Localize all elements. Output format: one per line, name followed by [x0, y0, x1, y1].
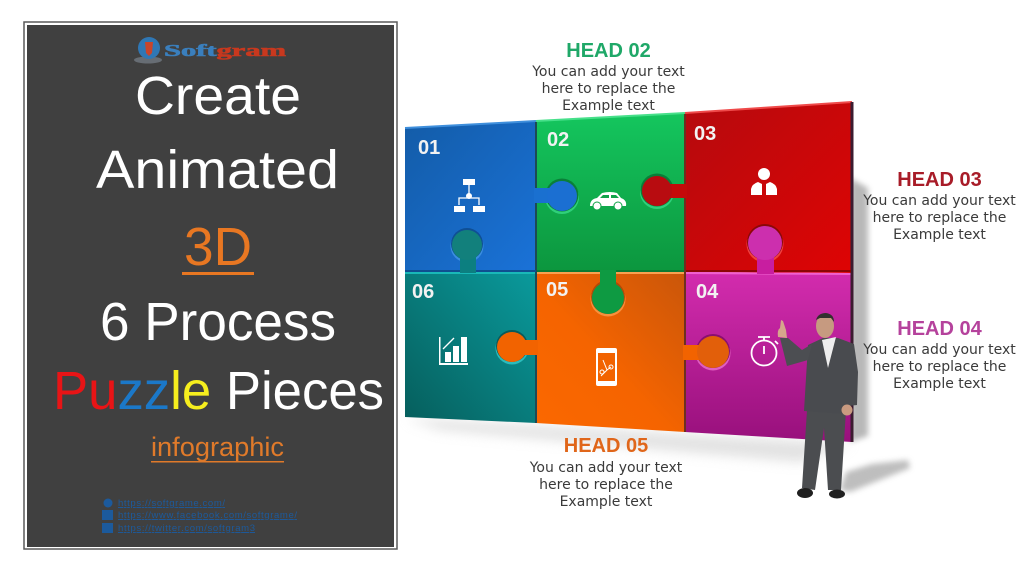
number 05: 05	[546, 279, 568, 301]
icon: smartphone	[596, 348, 617, 386]
knob: 05 into 04	[683, 334, 730, 370]
callout: HEAD 04	[862, 318, 1016, 392]
number 02: 02	[547, 129, 569, 151]
logo: Softgram	[134, 37, 286, 64]
figure: presenter	[778, 313, 858, 498]
number 03: 03	[694, 123, 716, 145]
panel: title card	[24, 22, 397, 549]
shirt	[822, 337, 836, 368]
title line: Animated: Animated	[96, 140, 339, 200]
callout: HEAD 02: You can add your text	[531, 64, 685, 80]
callout: HEAD 05: HEAD 05	[564, 435, 648, 457]
title line: Create: Create	[135, 66, 301, 126]
legs	[802, 410, 846, 490]
social links: https://twitter.com/softgram3	[118, 523, 255, 534]
callout: HEAD 03: HEAD 03	[897, 169, 982, 191]
knob: 05 into 06	[496, 330, 538, 364]
callout: HEAD 03: You can add your text	[862, 193, 1016, 209]
callout: HEAD 02	[531, 40, 685, 114]
puzzle: six pieces	[405, 102, 852, 442]
logo: Softgram: Soft gram	[164, 41, 286, 60]
callout: HEAD 04: Example text	[893, 376, 986, 392]
icon: businessman	[751, 168, 777, 195]
hand	[778, 320, 787, 338]
callout: HEAD 03: here to replace the	[873, 210, 1006, 226]
social links: https://softgrame.com/	[118, 498, 225, 509]
number 04: 04	[696, 281, 719, 303]
knob: 03 into 02	[640, 174, 687, 209]
piece 03	[685, 102, 852, 273]
callout: HEAD 04: HEAD 04	[897, 318, 983, 340]
knob: 06 into 01	[450, 228, 484, 273]
jacket	[804, 338, 858, 414]
callout: HEAD 04: You can add your text	[862, 342, 1016, 358]
callout: HEAD 02: here to replace the	[542, 81, 675, 97]
icon: stopwatch	[752, 337, 778, 366]
head	[816, 314, 834, 338]
title line: 6 Process: 6 Process	[100, 292, 336, 352]
icon: hierarchy	[454, 179, 485, 212]
callout: HEAD 04: here to replace the	[873, 359, 1006, 375]
knob: 01 into 02	[534, 178, 579, 214]
callout: HEAD 05	[529, 435, 683, 510]
piece 02	[536, 113, 685, 272]
icon: bar chart	[439, 337, 468, 365]
piece 05	[536, 272, 685, 432]
title line: Puzzle Pieces: Puzzle Pieces	[53, 361, 384, 421]
arm	[780, 338, 812, 366]
social links: https://www.facebook.com/softgrame/	[118, 510, 297, 521]
knob: 02 into 05	[590, 270, 626, 316]
bevels	[405, 102, 852, 442]
icon: car	[590, 192, 626, 210]
title line: 3D: 3D	[184, 217, 252, 277]
callout: HEAD 02: HEAD 02	[566, 40, 651, 62]
social links	[102, 498, 297, 534]
subtitle: infographic: infographic	[151, 432, 284, 462]
callout: HEAD 05: here to replace the	[539, 477, 673, 493]
shadow: man on floor	[840, 460, 910, 492]
number 06: 06	[412, 281, 434, 303]
piece 04	[685, 272, 852, 442]
callout: HEAD 05: You can add your text	[529, 460, 683, 476]
shadow: puzzle wall	[405, 178, 868, 462]
knob: 04 into 03	[746, 224, 784, 274]
piece 01	[405, 121, 536, 272]
callout: HEAD 05: Example text	[560, 494, 653, 510]
callout: HEAD 02: Example text	[562, 98, 655, 114]
piece 06	[405, 272, 536, 423]
shoes	[797, 488, 813, 498]
callout: HEAD 03: Example text	[893, 227, 986, 243]
callout: HEAD 03	[862, 169, 1016, 243]
number 01: 01	[418, 137, 440, 159]
